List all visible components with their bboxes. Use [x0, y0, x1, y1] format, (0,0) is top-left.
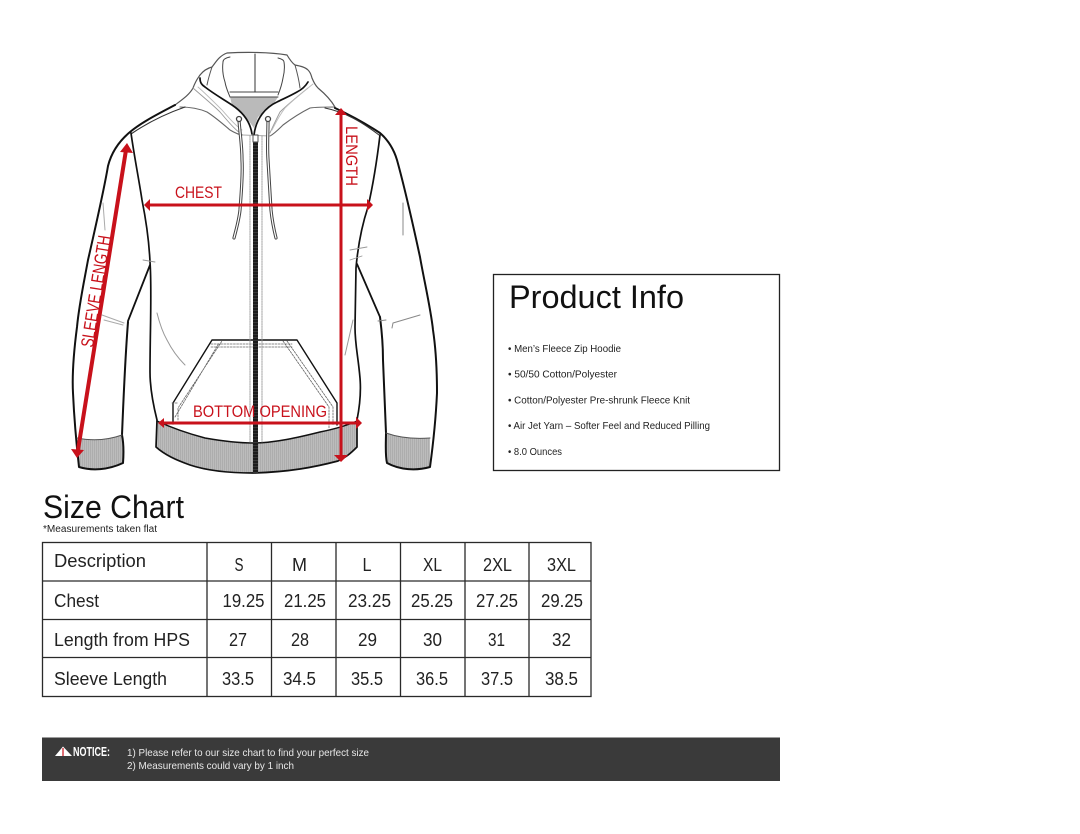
zipper — [250, 135, 262, 473]
note: measurements taken flat: *Measurements taken flat — [43, 524, 157, 535]
row: length from HPS: 32 — [552, 630, 571, 650]
row: length from HPS: 31 — [488, 630, 505, 650]
row: description: 2XL — [483, 555, 512, 575]
row: chest: 19.25 — [222, 591, 264, 611]
row: length from HPS: 27 — [229, 630, 247, 650]
row: chest: 21.25 — [284, 591, 326, 611]
row: length from HPS — [54, 630, 571, 650]
label: length: LENGTH — [342, 126, 361, 186]
notice text — [127, 747, 369, 772]
heading: product info: Product Info — [509, 279, 684, 315]
notice text: 2) Measurements could vary by 1 inch — [127, 760, 294, 772]
row: sleeve length: 35.5 — [351, 669, 383, 689]
left sleeve — [73, 105, 185, 469]
row: chest — [54, 591, 583, 611]
measurement arrows — [71, 108, 373, 462]
arrow: length — [334, 108, 348, 462]
hoodie technical drawing — [73, 52, 437, 473]
drawstrings — [234, 116, 276, 238]
kangaroo pocket — [172, 340, 337, 428]
hood — [175, 52, 335, 136]
row: sleeve length: 34.5 — [283, 669, 316, 689]
row: sleeve length: 38.5 — [545, 669, 578, 689]
body outline — [131, 133, 380, 473]
row: length from HPS: 28 — [291, 630, 309, 650]
notice text: 1) Please refer to our size chart to find your perfect size — [127, 747, 369, 759]
label: chest: CHEST — [175, 183, 222, 202]
row: description: 3XL — [547, 555, 576, 575]
row: description: M — [292, 555, 307, 575]
product feature list: • 8.0 Ounces — [508, 446, 562, 458]
row: description: XL — [423, 555, 442, 575]
arrow: sleeve length — [71, 143, 133, 458]
icon: warning triangle — [55, 746, 72, 756]
row: sleeve length: Sleeve Length — [54, 669, 167, 689]
product feature list: • Air Jet Yarn – Softer Feel and Reduced Pilling — [508, 420, 710, 432]
row: length from HPS: Length from HPS — [54, 630, 190, 650]
row: description: S — [234, 555, 244, 575]
notice bar — [42, 738, 780, 781]
label: sleeve length: SLEEVE LENGTH — [77, 234, 115, 349]
row: sleeve length: 33.5 — [222, 669, 254, 689]
row: sleeve length: 36.5 — [416, 669, 448, 689]
product feature list: • Cotton/Polyester Pre-shrunk Fleece Knit — [508, 394, 690, 406]
right sleeve — [325, 108, 437, 469]
row: chest: 27.25 — [476, 591, 518, 611]
row: length from HPS: 29 — [358, 630, 377, 650]
row: chest: Chest — [54, 591, 99, 611]
product feature list — [508, 343, 710, 458]
arrow: bottom opening — [158, 417, 362, 429]
row: description: Description — [54, 551, 146, 571]
row: sleeve length — [54, 669, 578, 689]
row: chest: 23.25 — [348, 591, 391, 611]
row: length from HPS: 30 — [423, 630, 442, 650]
row: chest: 25.25 — [411, 591, 453, 611]
arrow: chest — [144, 199, 373, 211]
label: bottom opening: BOTTOM OPENING — [193, 402, 327, 421]
row: description: L — [362, 555, 372, 575]
size chart table — [42, 542, 591, 697]
product feature list: • 50/50 Cotton/Polyester — [508, 368, 617, 380]
panel: product info — [494, 274, 780, 470]
row: description — [54, 551, 576, 575]
product feature list: • Men’s Fleece Zip Hoodie — [508, 343, 621, 355]
heading: size chart: Size Chart — [43, 489, 184, 525]
notice label: NOTICE: — [73, 744, 110, 759]
row: sleeve length: 37.5 — [481, 669, 513, 689]
row: chest: 29.25 — [541, 591, 583, 611]
